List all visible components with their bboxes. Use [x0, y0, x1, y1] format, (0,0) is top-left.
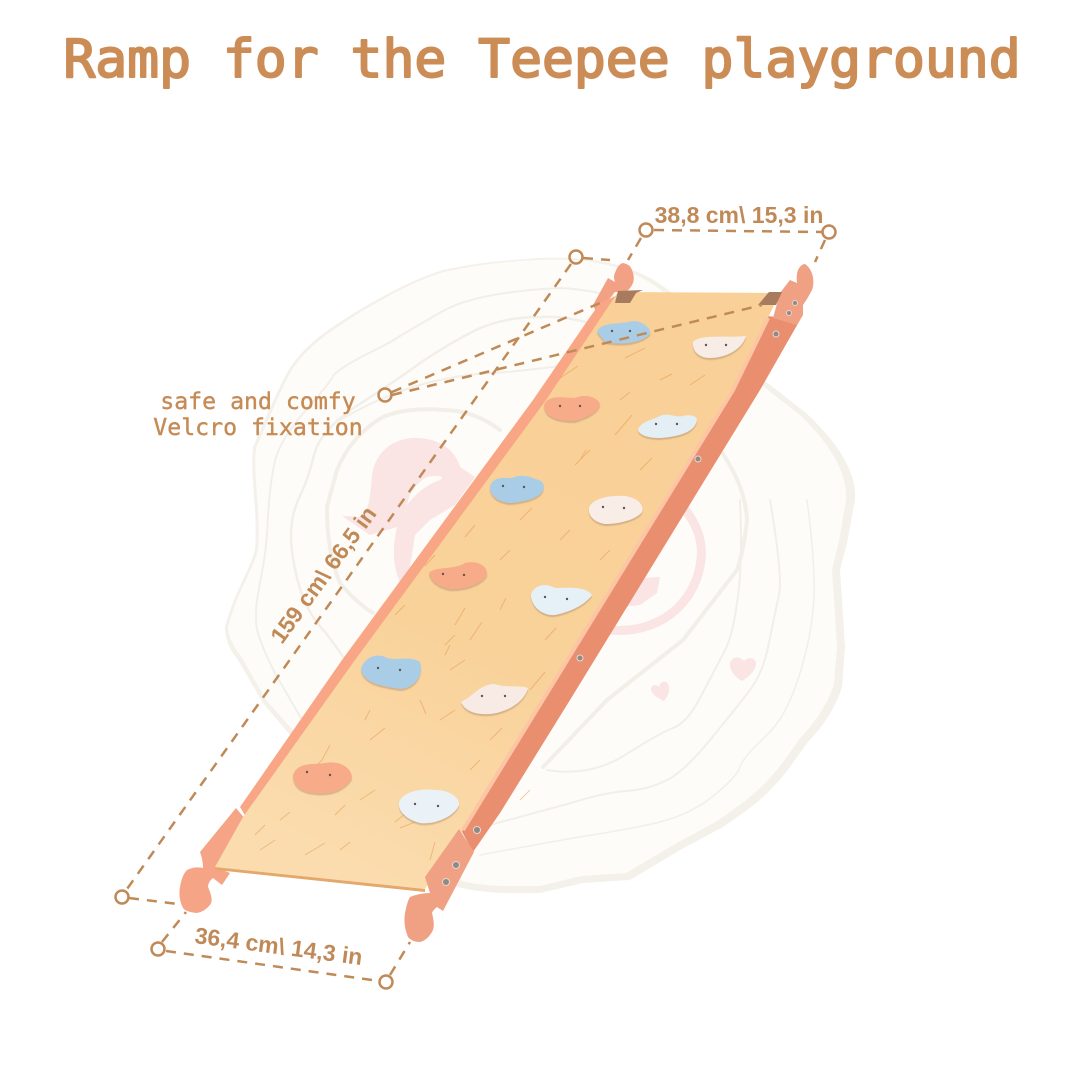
dimension: bottom width: 36,4 cm\ 14,3 in — [193, 922, 364, 970]
outer slice band — [225, 258, 855, 893]
title: Ramp for the Teepee playground — [63, 29, 1021, 90]
callout: velcro fixation: safe and comfy — [160, 388, 356, 415]
icon: heart large — [730, 657, 756, 681]
deck right highlight — [463, 318, 768, 830]
left rail — [240, 295, 618, 820]
logo: pink leaf — [622, 577, 660, 607]
left foot section — [179, 808, 246, 913]
background wood-slice logo — [225, 258, 855, 893]
logo: white crescent — [407, 476, 442, 505]
deck front edge — [215, 867, 425, 892]
wooden deck — [215, 292, 780, 889]
climbing holds — [293, 321, 746, 823]
logo: pink figure — [342, 438, 475, 582]
callout: velcro fixation — [153, 303, 762, 441]
dimension: bottom width — [152, 912, 410, 988]
right rail — [461, 316, 800, 852]
bolts — [442, 300, 798, 886]
dimension: length: 159 cm\ 66,5 in — [265, 501, 381, 648]
hold screw holes — [306, 330, 727, 807]
inner slice fill — [228, 260, 846, 886]
left rail upper section — [593, 263, 634, 314]
dimension: length — [116, 250, 610, 904]
right rail lower section — [404, 829, 474, 942]
right rail upper section — [773, 264, 813, 325]
ramp — [179, 263, 813, 942]
callout: velcro fixation: Velcro fixation — [153, 414, 363, 441]
velcro straps — [615, 290, 782, 305]
dimension: top width: 38,8 cm\ 15,3 in — [655, 202, 823, 228]
dimension: top width — [628, 202, 836, 262]
growth rings — [256, 288, 814, 855]
icon: heart small — [651, 682, 669, 701]
logo: pink ring — [610, 507, 701, 630]
wood grain — [255, 348, 705, 860]
